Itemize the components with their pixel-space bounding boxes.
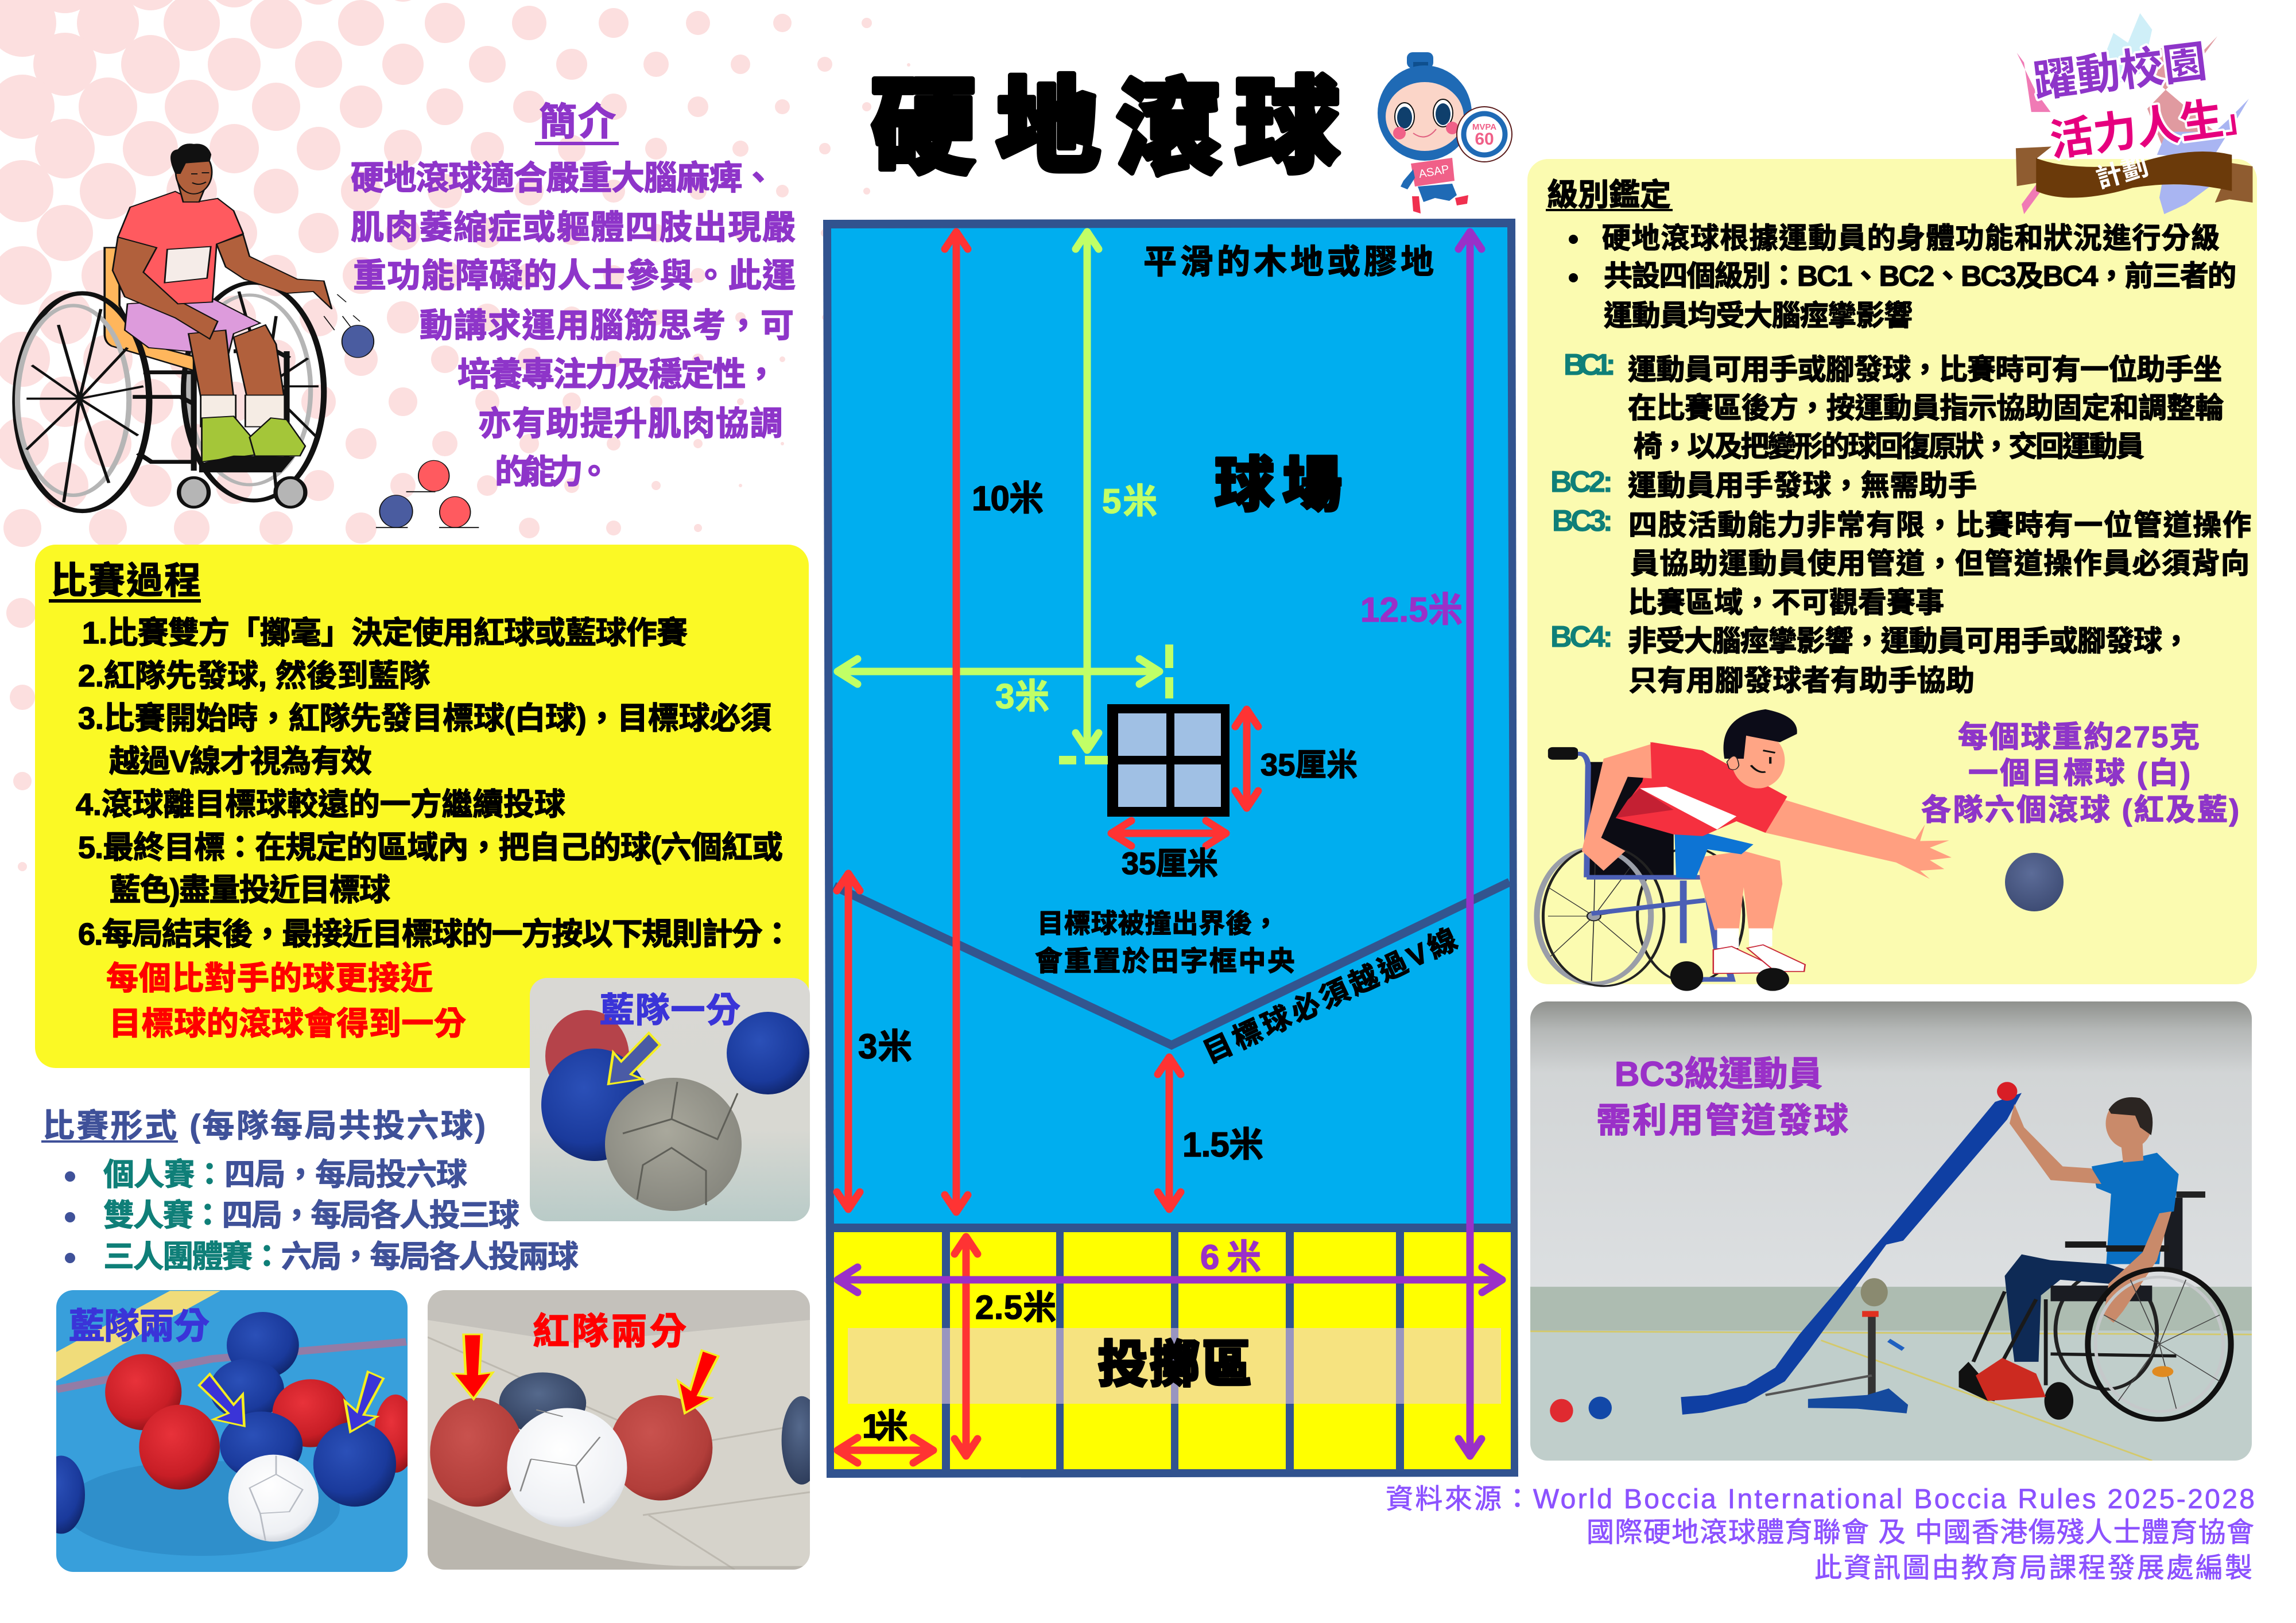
court labels: 12.5米: [1360, 591, 1463, 629]
icon: ASAP mascot: 60: [1475, 130, 1494, 149]
title: 地: [996, 68, 1100, 185]
court labels: 35厘米: [1122, 847, 1218, 881]
logo: campaign badge: 計劃: [2092, 150, 2151, 194]
court labels: 會重置於田字框中央: [1035, 946, 1295, 977]
logo: campaign badge: 活力人生」: [2047, 90, 2258, 166]
court labels: 2.5米: [975, 1289, 1056, 1326]
text block: match formats: 比賽形式 (每隊每局共投六球): [42, 1108, 486, 1144]
photo: BC3 athlete with ramp: 需利用管道發球: [1596, 1101, 1848, 1140]
text block: BC4: 只有用腳發球者有助手協助: [1628, 665, 1975, 697]
text block: BC4: BC4:: [1550, 620, 1613, 654]
panel: classification: [1527, 159, 2257, 984]
translucent label band: [848, 1328, 1501, 1404]
target box: [1107, 704, 1230, 817]
arrow: 6 m: [837, 1267, 1502, 1292]
arrow: 2.5 m: [955, 1237, 978, 1456]
title: 球: [1235, 68, 1340, 185]
arrow: 1.5 m: [1158, 1057, 1181, 1209]
text block: BC3: [1552, 504, 2251, 619]
photo: BC3 athlete with ramp: [1530, 1001, 2255, 1463]
text block: process steps: 藍色)盡量投近目標球: [110, 873, 390, 907]
court labels: [858, 243, 1463, 1445]
arrow: 3 m horizontal: [837, 659, 1159, 684]
heading: classification: 級別鑑定: [1547, 178, 1671, 212]
court labels: 目標球必須越過V線: [1199, 923, 1462, 1069]
court labels: 10米: [972, 479, 1044, 518]
heading: match process: 比賽過程: [51, 560, 201, 601]
text block: ball facts: 一個目標球 (白): [1968, 757, 2190, 790]
court labels: 平滑的木地或膠地: [1143, 243, 1434, 281]
text block: match formats: 個人賽：四局，每局投六球: [103, 1158, 467, 1192]
text block: process steps: 6.每局結束後，最接近目標球的一方按以下規則計分：: [78, 917, 793, 952]
arrow: 5 m: [1076, 232, 1099, 750]
heading: intro: 簡介: [539, 100, 616, 143]
text block: BC1: [1564, 348, 2224, 463]
arrow: 1 m: [837, 1438, 933, 1463]
text block: BC2: 運動員用手發球，無需助手: [1628, 469, 1977, 502]
text block: process steps: 越過V線才視為有效: [109, 744, 372, 779]
text block: BC1: 在比賽區後方，按運動員指示協助固定和調整輪: [1628, 392, 2224, 424]
photo: BC3 athlete with ramp: BC3級運動員: [1615, 1055, 1822, 1093]
text block: process steps: [76, 616, 793, 1042]
arrow: 10 m: [945, 232, 968, 1212]
text block: process steps: 4.滾球離目標球較遠的一方繼續投球: [76, 787, 565, 822]
text block: BC1: 椅，以及把變形的球回復原狀，交回運動員: [1634, 430, 2144, 463]
text block: match formats: [41, 1108, 579, 1274]
arrow: 12.5 m: [1459, 232, 1481, 1456]
title: [871, 68, 1340, 188]
text block: process steps: 2.紅隊先發球, 然後到藍隊: [78, 659, 430, 693]
dashes: reference marks: [1059, 644, 1173, 764]
logo: campaign badge: [2009, 13, 2258, 214]
icon: boccia ball: [2005, 853, 2064, 911]
court labels: 1.5米: [1182, 1125, 1263, 1164]
photo: blue team two points: [37, 1290, 417, 1572]
photo: red team two points: 紅隊兩分: [533, 1311, 687, 1352]
text block: ball facts: 每個球重約275克: [1958, 721, 2200, 754]
text block: BC4: [1550, 620, 2190, 697]
icon: ASAP mascot: ASAP: [1418, 163, 1450, 181]
text block: ball facts: 各隊六個滾球 (紅及藍): [1921, 794, 2239, 827]
text block: ball facts: [1921, 721, 2239, 827]
text block: bullets: [1569, 222, 2236, 332]
text block: process steps: 3.比賽開始時，紅隊先發目標球(白球)，目標球必須: [78, 701, 771, 736]
throwing area cells: [834, 1232, 1511, 1469]
logo: campaign badge: 「: [2009, 56, 2058, 110]
text block: intro: 的能力。: [495, 453, 611, 491]
text block: intro: 重功能障礙的人士參與。此運: [353, 257, 796, 294]
text block: process steps: 每個比對手的球更接近: [106, 960, 433, 996]
panel: match process: [35, 545, 809, 1068]
V line: [834, 882, 1510, 1045]
arrow: 35 cm vertical: [1235, 709, 1258, 808]
text block: bullets: 共設四個級別：BC1、BC2、BC3及BC4，前三者的: [1604, 260, 2236, 292]
text block: process steps: 1.比賽雙方「擲毫」決定使用紅球或藍球作賽: [82, 616, 688, 650]
photo: blue team two points: 藍隊兩分: [69, 1307, 210, 1346]
arrow: 3 m vertical: [837, 873, 860, 1209]
text block: source credits: 資料來源：World Boccia International Boccia Rules 2025-2028: [1386, 1484, 2255, 1515]
court labels: 球場: [1215, 452, 1342, 519]
text block: BC3: 比賽區域，不可觀看賽事: [1628, 587, 1944, 619]
court labels: 目標球被撞出界後，: [1037, 908, 1279, 938]
text block: intro: 硬地滾球適合嚴重大腦麻痺、: [351, 160, 775, 197]
text block: source credits: [1386, 1484, 2255, 1583]
text block: BC3: BC3:: [1552, 504, 1613, 538]
text block: intro: 培養專注力及穩定性，: [457, 356, 778, 393]
title: 硬: [871, 69, 976, 187]
text block: source credits: 此資訊圖由教育局課程發展處編製: [1814, 1553, 2252, 1583]
text block: BC1: BC1:: [1564, 348, 1616, 382]
text block: BC1: 運動員可用手或腳發球，比賽時可有一位助手坐: [1628, 354, 2222, 386]
court labels: 3米: [995, 677, 1049, 716]
text block: BC3: 員協助運動員使用管道，但管道操作員必須背向: [1630, 548, 2250, 580]
text block: BC4: 非受大腦痙攣影響，運動員可用手或腳發球，: [1628, 625, 2190, 657]
title: 滾: [1116, 71, 1221, 188]
photo: blue team one point: [530, 978, 810, 1221]
text block: process steps: 目標球的滾球會得到一分: [109, 1005, 466, 1042]
text block: intro: 亦有助提升肌肉協調: [478, 405, 783, 442]
text block: intro: 肌肉萎縮症或軀體四肢出現嚴: [351, 209, 796, 246]
photo: blue team one point: 藍隊一分: [600, 991, 740, 1030]
court labels: 5米: [1102, 482, 1157, 521]
illustration: wheelchair player tossing ball: [15, 143, 479, 527]
illustration: athlete throwing ball: [1537, 709, 1952, 991]
icon: ASAP mascot: MVPA: [1472, 122, 1496, 132]
court labels: 3米: [858, 1027, 912, 1066]
text block: bullets: 運動員均受大腦痙攣影響: [1604, 300, 1913, 332]
diagram: boccia court: [823, 219, 1518, 1478]
text block: match formats: 雙人賽：四局，每局各人投三球: [103, 1198, 519, 1233]
text block: BC2: BC2:: [1550, 465, 1613, 499]
text block: BC3: 四肢活動能力非常有限，比賽時有一位管道操作: [1628, 509, 2251, 541]
photo: red team two points: [428, 1290, 822, 1570]
text block: intro: [351, 160, 796, 491]
text block: match formats: 三人團體賽：六局，每局各人投兩球: [103, 1240, 579, 1274]
arrow: 35 cm horizontal: [1111, 821, 1226, 846]
court labels: 1米: [862, 1408, 908, 1445]
logo: campaign badge: 躍動校園: [2030, 37, 2209, 107]
text block: bullets: 硬地滾球根據運動員的身體功能和狀況進行分級: [1602, 222, 2220, 254]
court labels: 投擲區: [1097, 1336, 1252, 1393]
court labels: 6 米: [1200, 1238, 1261, 1276]
icon: ASAP mascot: [1378, 52, 1512, 213]
text block: process steps: 5.最終目標：在規定的區域內，把自己的球(六個紅或: [78, 830, 783, 865]
court labels: 35厘米: [1261, 748, 1358, 782]
text block: intro: 動講求運用腦筋思考，可: [420, 307, 794, 344]
text block: source credits: 國際硬地滾球體育聯會 及 中國香港傷殘人士體育協會: [1587, 1517, 2254, 1548]
